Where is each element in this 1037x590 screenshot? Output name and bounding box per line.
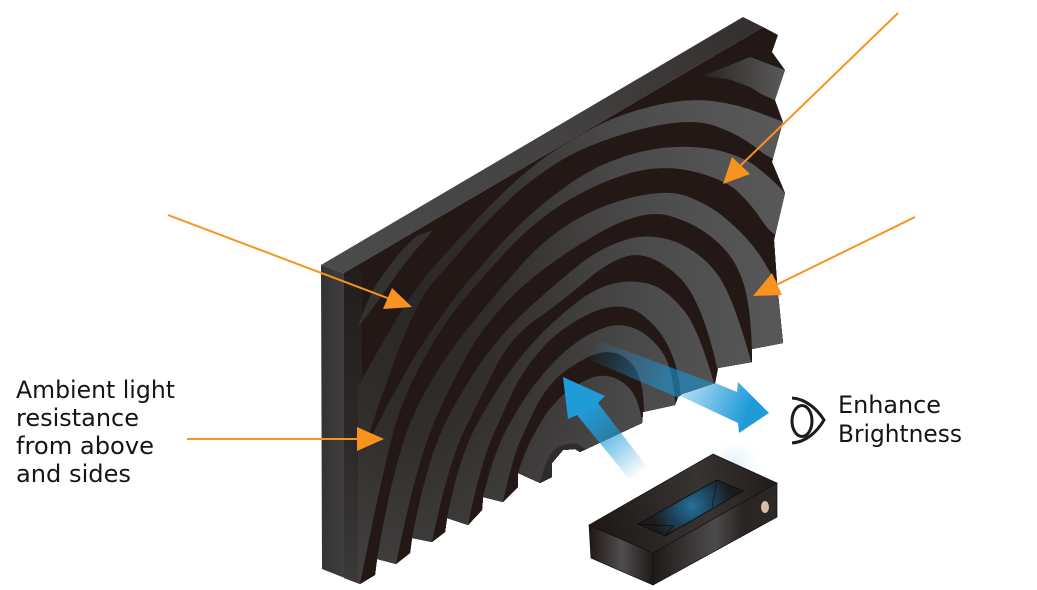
screen front ridges <box>340 20 800 590</box>
arrow: orange right <box>753 217 915 296</box>
projector glow <box>703 434 767 490</box>
text: enhance brightness <box>838 391 962 448</box>
arrow: orange lower left <box>187 427 384 451</box>
projector button <box>761 501 769 513</box>
text: enhance brightness: Enhance <box>838 391 941 419</box>
projector left face <box>589 525 653 585</box>
screen panel <box>321 17 800 590</box>
screen side face <box>321 265 360 584</box>
text: ambient light resistance: Ambient light <box>16 376 175 404</box>
text: ambient light resistance: and sides <box>16 460 131 488</box>
icon: eye <box>792 398 824 443</box>
projector right face <box>653 483 777 585</box>
projector lens window <box>638 480 743 536</box>
projector device <box>589 454 777 585</box>
text: ambient light resistance: from above <box>16 432 154 460</box>
arrow: orange upper right <box>723 13 898 184</box>
text: ambient light resistance <box>16 376 175 488</box>
projector top face <box>589 454 777 553</box>
arrow: outgoing blue light to viewer <box>640 352 769 433</box>
arrow: incoming blue light from projector <box>563 377 648 480</box>
screen top face <box>321 17 763 273</box>
arrow: orange upper left <box>168 215 412 309</box>
text: enhance brightness: Brightness <box>838 420 962 448</box>
text: ambient light resistance: resistance <box>16 404 139 432</box>
